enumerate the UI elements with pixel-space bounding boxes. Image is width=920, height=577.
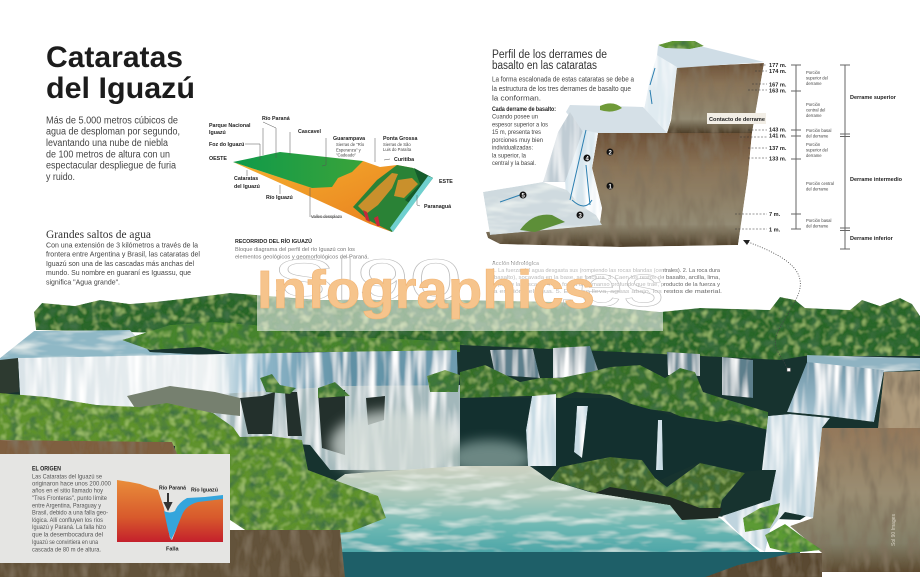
text: el origen: "Tres Fronteras", punto límite [32,495,108,502]
right cliff upper [878,371,920,430]
block diagram: recorrido del río Iguazú [209,116,453,232]
heights [769,63,787,234]
map: mountain highlights [358,173,418,214]
scale 1 [791,65,801,229]
dark water [330,552,800,577]
mid trees [122,322,460,356]
label: derrame superior: Derrame superior [850,95,897,101]
portions: superior del [806,76,828,80]
intro text: y ruido. [46,172,75,183]
heights: 143 m. [769,128,787,134]
bushes over lower falls [260,370,460,398]
watermark: outline text [272,248,664,319]
map: green plateau [233,152,363,188]
caption: recorrido: Bloque diagrama del perfil del río Iguazú con los [235,247,355,253]
label: derrame inferior: Derrame inferior [850,236,894,242]
portions: Porción basal [806,128,831,133]
text: el origen [32,474,112,554]
bottom rock left [0,530,345,577]
map: dark ridge [405,168,433,205]
text: grandes saltos [46,240,200,286]
marker 4 [584,154,590,162]
left rock [0,358,19,394]
label: ponta grossa: Ponta Grossa [383,136,417,142]
label: sierras de são luis [383,142,412,152]
heights: 1 m. [769,228,781,234]
marker 2: 2 [608,150,612,156]
panel: el origen [0,454,230,563]
text: el origen: entre Argentina, Paraguay y [32,502,102,510]
base foam [483,182,602,235]
top water strip [657,46,764,68]
heights: 141 m. [769,134,787,140]
marker 5 [520,192,526,200]
text: cada derrame: Cada derrame de basalto: [492,106,556,113]
text: grandes saltos: Iguazú son una de las cascadas más anchas del [46,259,194,268]
label: sierras [336,142,365,158]
credit: Sol 90 Images [891,514,897,546]
grey rock outcrop [127,386,240,416]
text: acción hidrológica: Acción hidrológica [492,261,540,267]
label: sierras: Esperanza" y [336,148,362,152]
text: acción hidrológica: al pie de la cascada. 4. Se forma un remanso profundo que trae, producto de la fuerza y [492,282,720,288]
label: este: ESTE [439,179,453,185]
rock ledge [0,440,178,458]
callout arrow: dotted [743,240,800,372]
arrow [165,493,171,509]
text: cada derrame [492,106,556,167]
heading: el origen: EL ORIGEN [32,466,61,472]
label: cataratas: Cataratas [234,176,258,182]
heading: grandes saltos de agua: Grandes saltos de agua [46,229,151,241]
intro text: levantando una nube de niebla [46,138,168,149]
centre mist [448,440,532,476]
text: acción hidrológica: 1. La fuerza del agua desgasta sus (rompiendo las rocas blandas (centrales). 2. La roca dura [492,268,721,274]
marker 5: 5 [522,194,526,200]
text: el origen: Brasil, debido a una falla geo- [32,510,108,516]
text: cada derrame: Cuando posee un [492,114,539,120]
dark gorge background [0,340,920,520]
far tree line [34,293,920,360]
portions: derrame [806,81,822,86]
label: río iguazú: Río Iguazú [191,488,218,494]
portions: derrame [806,113,822,118]
grass on top [658,41,704,49]
intro text: espectacular despliegue de furia [46,160,177,172]
text: el origen: lógica. Allí confluyen los ríos [32,517,103,524]
label: sierras de são luis: Luis do Paraíta [383,147,412,152]
right cliff lower [790,428,920,572]
portions: Porción [806,70,821,75]
label: derrame intermedio: Derrame intermedio [850,177,903,183]
heights: 174 m. [769,69,787,75]
text: el origen: originaron hace unos 200.000 [32,480,112,488]
title [46,41,195,105]
label: río iguazú: Río Iguazú [266,195,293,201]
marker 3: 3 [578,214,582,220]
text: perfil intro: la estructura de los tres derrames de basalto que [492,84,631,93]
portions: del derrame [806,134,829,138]
label: sierras de são luis: Sierras de São [383,142,411,147]
water in the fault [164,495,223,540]
right lower falls [722,414,830,552]
label: contacto de derrame [707,113,766,124]
text: grandes saltos: Con una extensión de 3 kilómetros a través de la [46,240,199,250]
intro text: Más de 5.000 metros cúbicos de [46,116,179,126]
portions: del derrame [806,224,829,228]
marker 4: 4 [586,156,590,162]
diagram: stepped basalt cliff [483,41,766,247]
text: el origen: cascada de 80 m de altura. [32,546,101,554]
text: grandes saltos: significa "Agua grande". [46,278,120,286]
lower rock [486,133,752,247]
text: el origen: Iguazú y Paraná. La falla hizo [32,524,106,531]
left hill foliage [0,393,386,540]
elevation scale [735,63,903,249]
map: teal coast [390,176,433,232]
watermark: outline text: Sl90 [272,248,462,313]
text: el origen: años en el sitio llamado hoy [32,488,104,494]
mid ledge [566,105,667,133]
map: orange underside and plateau [233,161,413,232]
portions: derrame [806,153,822,158]
heights: 163 m. [769,88,787,94]
portions [806,70,834,228]
upper rock [667,63,764,133]
text: cada derrame: la superior, la [492,152,527,160]
heading: perfil de los derrames: basalto en las cataratas [492,60,597,72]
text: acción hidrológica [492,261,722,295]
watermark: panel [257,262,663,331]
right bottom greens [743,503,822,553]
text: grandes saltos: frontera entre Argentina y Brasil, las cataratas del [46,250,200,258]
label: parque nacional: Parque Nacional [209,123,251,129]
small island rocks [595,487,722,520]
label: sierras: Sierras de "Río [336,142,365,147]
mist [330,410,460,480]
small island [550,457,745,520]
watermark: outline text: .es [556,254,664,319]
portions: Porción central [806,181,834,186]
title: Cataratas [46,41,183,74]
text: grandes saltos: mundo. Su nombre en guaraní es Iguassu, que [46,268,191,277]
intro text: de 100 metros de altura con un [46,150,170,160]
text: cada derrame: central y la basal. [492,160,536,167]
text: el origen: Las Cataratas del Iguazú se [32,474,102,480]
heading: perfil de los derrames: Perfil de los derrames de [492,49,607,61]
marker 1: 1 [608,184,612,190]
main falls [18,350,458,408]
label: contacto de derrame: Contacto de derrame [709,117,765,123]
label: paranaguá: Paranaguá [424,204,451,210]
centre dark rock wall [460,398,768,480]
label: cascavel: Cascavel [298,129,322,135]
portions: Porción [806,102,821,107]
heights: 177 m. [769,63,787,69]
portions: Porción [806,142,821,147]
portions: central del [806,108,825,112]
map leaders [245,122,420,217]
heights: 133 m. [769,156,787,162]
text: cada derrame: porciones muy bien [492,137,544,144]
grass low [520,215,565,232]
left fall [543,112,583,182]
text: perfil intro [492,74,635,102]
map: red cuts [363,210,380,226]
heights: 137 m. [769,146,787,152]
label: falla: Falla [166,546,179,552]
map: mountains [353,165,433,232]
label: oeste: OESTE [209,156,227,162]
heading: perfil de los derrames [492,49,607,72]
label: cataratas [234,176,260,190]
panorama photo: Iguazú falls [0,293,920,577]
lower falls and rocks [130,385,460,470]
text: perfil intro: La forma escalonada de estas cataratas se debe a [492,74,635,84]
text: cada derrame: 15 m, presenta tres [492,129,541,136]
text: perfil intro: la conforman. [492,94,541,102]
upper river, left [0,330,230,362]
centre falls [526,394,663,470]
right upper fall [787,362,884,422]
text: el origen: que la desembocadura del [32,532,103,538]
heights: 7 m. [769,212,781,218]
portions: Porción basal [806,218,831,223]
portions: del derrame [806,186,829,192]
label: curitiba: Curitiba [394,157,414,163]
caption: recorrido: RECORRIDO DEL RÍO IGUAZÚ [235,237,312,245]
text: acción hidrológica: (basalto), socavada en la base, se fractura. 3. Caen los restos de basalto, arcilla, lima, [492,275,720,281]
text: cada derrame: individualizadas: [492,144,533,152]
text: el origen: Iguazú se convirtiera en una [32,539,98,546]
right upper river [807,355,920,372]
intro text [46,116,180,183]
marker 3 [576,212,584,220]
heights: 167 m. [769,82,787,88]
label: guarampava: Guarampava [333,136,365,142]
grass mid [600,103,622,112]
label: iguazú: Iguazú [209,130,226,136]
caption: recorrido [235,237,369,260]
caption: recorrido: elementos geológicos y geomorfológicos del Paraná. [235,254,369,260]
text: acción hidrológica: la erosión del agua. 5. El río se lleva, aguas abajo, los restos de material. [492,289,722,295]
watermark: infographics: Infographics [257,260,595,320]
pool water [322,466,760,552]
label: río paraná: Río Paraná [262,116,290,122]
bottom rock right [705,553,822,577]
label: sierras: "Cadeado" [336,152,356,158]
lower fall [565,130,602,218]
label: valles: Valles dessplaza [311,214,343,219]
upper fall [643,55,677,133]
dashes [735,65,767,229]
chart: falla [117,480,223,552]
portions: superior del [806,148,828,152]
label: río paraná: Río Paraná [159,486,187,492]
centre island foliage [460,365,768,430]
text: cada derrame: espesor superior a los [492,122,548,128]
marker 1 [606,182,614,190]
intro text: agua de desploman por segundo, [46,126,180,138]
label: foz: Foz do Iguazú [209,142,244,148]
water arrows [500,68,655,206]
marker 2 [606,148,614,156]
title: del Iguazú [46,72,195,105]
dark rocks in lower falls [240,390,385,455]
scale 2 [840,65,850,249]
far right-centre falls [490,346,753,398]
label: cataratas: del Iguazú [234,184,260,190]
